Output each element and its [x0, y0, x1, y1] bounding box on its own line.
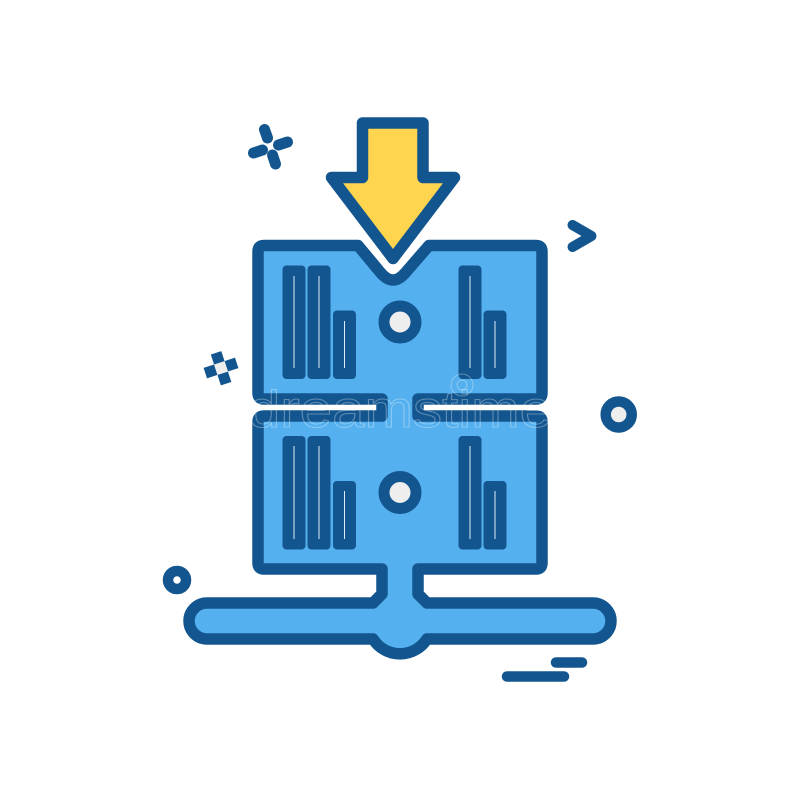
icon: lower server indicator light: [384, 476, 416, 508]
icon: chevron: [572, 225, 592, 247]
icon: upper server indicator light: [384, 306, 416, 338]
icon: right ring: [606, 402, 632, 428]
icon: checker sparkle: [200, 348, 242, 389]
icon: left ring: [168, 571, 186, 589]
icon: motion dashes: [507, 662, 582, 676]
icon: server stack with network bar: [189, 246, 611, 654]
icon: download arrow: [332, 123, 454, 258]
icon: four-petal sparkle: [254, 130, 288, 164]
watermark: dreamstime: [248, 381, 552, 439]
panel: upper server bars: [282, 266, 506, 379]
panel: lower server bars: [282, 436, 506, 550]
